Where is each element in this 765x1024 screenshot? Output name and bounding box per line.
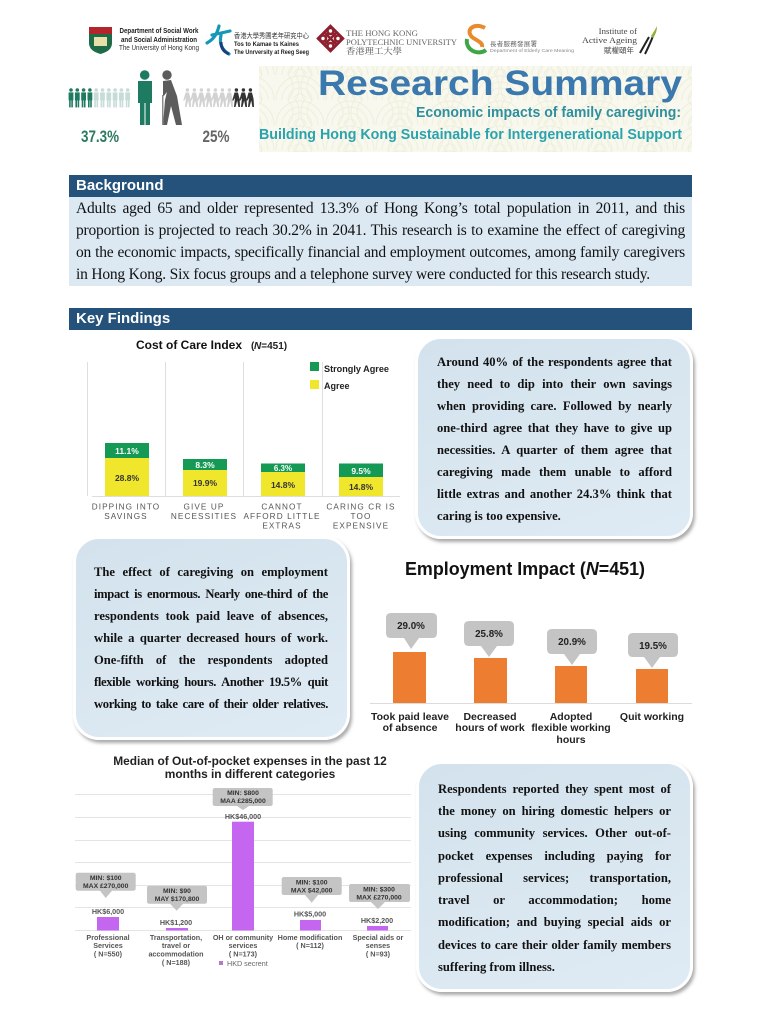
category labels: AFFORD LITTLE xyxy=(243,512,321,521)
category labels: ( N=93) xyxy=(366,950,391,958)
legend: HKD secrent xyxy=(227,959,268,968)
callout: cost of care summary: little extras and another 24.3% think that xyxy=(437,487,672,501)
bar: cannot afford little extras xyxy=(261,464,305,496)
category labels xyxy=(371,711,684,746)
logo: HKU crest and department name: The University of Hong Kong xyxy=(119,43,199,52)
heading: Key Findings xyxy=(69,308,692,330)
bar: transportation: HK$1,200 xyxy=(160,918,192,927)
statistic: 25%: 25% xyxy=(202,127,230,146)
logo: Institute of Active Ageing: Active Ageing xyxy=(582,35,638,45)
chart: Cost of Care Index stacked bars xyxy=(88,340,400,530)
logo: Hong Kong Polytechnic University: 香港理工大學 xyxy=(346,46,403,56)
callout: out-of-pocket summary: devices to care their older family members xyxy=(438,938,671,952)
subtitle line 1: Economic impacts of family caregiving: xyxy=(416,104,681,121)
callout: cost of care summary: necessities. A quarter of them agree that xyxy=(437,443,672,457)
heading: Background xyxy=(69,175,692,197)
bar: quit working xyxy=(628,633,678,703)
heading: Key Findings: Key Findings xyxy=(76,310,170,327)
bar: home modification: HK$5,000 xyxy=(294,910,326,918)
logo: Sau Po Centre style emblem and text: Tos to Kamae ts Kaines xyxy=(234,41,299,48)
bar: took paid leave xyxy=(386,613,437,703)
category labels: Quit working xyxy=(620,711,684,723)
category labels: ( N=173) xyxy=(229,950,258,958)
chart title: Cost of Care Index xyxy=(136,340,243,352)
category labels: travel or xyxy=(162,941,190,950)
bar: took paid leave: 29.0% xyxy=(397,621,425,632)
logo: HKU crest and department name xyxy=(89,26,199,54)
category labels: EXPENSIVE xyxy=(333,522,389,530)
icon: large green adult figure xyxy=(138,70,152,125)
bar: professional services xyxy=(76,873,136,930)
callout: employment summary xyxy=(73,536,350,740)
callout: cost of care summary: they need to dip into their own savings xyxy=(437,377,672,391)
category labels: hours of work xyxy=(455,722,525,734)
bar: special aids: MAX £270,000 xyxy=(356,894,402,902)
chart: median out-of-pocket expenses xyxy=(75,754,411,968)
callout: cost of care summary: one-third agree that they have to give up xyxy=(437,421,672,435)
category labels xyxy=(86,933,404,967)
bar: cannot afford little extras: 6.3% xyxy=(274,464,292,473)
callout: out-of-pocket summary: professional services; transportation, xyxy=(438,871,671,885)
bar: decreased hours: 25.8% xyxy=(475,629,503,640)
bar: flexible hours: 20.9% xyxy=(558,637,586,648)
bar: professional services: MIN: $100 xyxy=(90,875,122,882)
logo: Hong Kong Polytechnic University xyxy=(318,26,457,56)
logo: HKU crest and department name: Department of Social Work xyxy=(120,26,198,35)
logo: Hong Kong Polytechnic University: POLYTECHNIC UNIVERSITY xyxy=(346,37,457,47)
category labels: Took paid leave xyxy=(371,711,449,723)
bar: cannot afford little extras: 14.8% xyxy=(271,480,295,490)
bar: special aids: MIN: $300 xyxy=(363,886,395,894)
callout: cost of care summary: caregiving made them unable to afford xyxy=(437,465,672,479)
bar: dipping into savings xyxy=(105,443,149,496)
sample size: N=451) xyxy=(254,341,287,352)
legend: Strongly Agree xyxy=(324,364,389,374)
category labels: flexible working xyxy=(531,722,611,734)
bar: caring is too expensive: 9.5% xyxy=(351,466,371,476)
bar: caring is too expensive: 14.8% xyxy=(349,482,373,492)
bar: dipping into savings: 11.1% xyxy=(115,446,139,456)
category labels: Special aids or xyxy=(353,933,404,942)
callout: cost of care summary xyxy=(415,336,693,539)
panel: background text xyxy=(69,197,692,286)
bar: give up necessities xyxy=(183,459,227,496)
callout: cost of care summary: when providing care. Followed by nearly xyxy=(437,399,672,413)
logo: Sau Po Centre style emblem and text: The Unrversity at Reeg Seeg xyxy=(234,49,309,56)
subtitle line 2: Building Hong Kong Sustainable for Intergenerational Support xyxy=(259,126,682,143)
callout: cost of care summary: caring is too expensive. xyxy=(437,509,561,523)
category labels: NECESSITIES xyxy=(171,512,237,521)
category labels: CANNOT xyxy=(261,502,303,512)
panel: background text: in Hong Kong. Six focus groups and a telephone survey were conducted for this research study. xyxy=(76,266,650,283)
bar: OH or community services: MIN: $800 xyxy=(227,790,259,797)
callout: employment summary: respondents took paid leave of absences, xyxy=(94,609,328,623)
icon: row of small figures, 37.3% highlighted xyxy=(69,88,130,107)
bar: home modification: MAX $42,000 xyxy=(291,888,333,894)
category labels: ( N=550) xyxy=(94,950,123,958)
bar: transportation xyxy=(147,886,207,930)
bar: professional services: MAX £270,000 xyxy=(83,883,129,890)
icon: large grey older adult with cane xyxy=(162,70,182,125)
bar: give up necessities: 19.9% xyxy=(193,478,217,488)
category labels: Professional xyxy=(86,933,130,942)
callout: employment summary: The effect of caregiving on employment xyxy=(94,565,328,579)
category labels: Decreased xyxy=(463,711,517,723)
callout: employment summary: working to take care of their older relatives. xyxy=(94,697,328,711)
bar: home modification: MIN: $100 xyxy=(296,880,328,886)
heading: Background: Background xyxy=(76,177,164,194)
category labels: Transportation, xyxy=(150,933,202,942)
panel: background text: on the economic impacts, specifically financial and employment outcomes, among family caregivers xyxy=(76,244,685,261)
callout: out-of-pocket summary: using community services. Other out-of- xyxy=(438,826,671,840)
bar: quit working: 19.5% xyxy=(639,641,667,652)
legend: Agree xyxy=(324,381,350,391)
category labels: Home modification xyxy=(278,933,342,942)
logo: Institute of Active Ageing: Institute of xyxy=(599,26,637,36)
bar: decreased hours xyxy=(464,621,514,703)
category labels: hours xyxy=(556,734,586,746)
category labels: DIPPING INTO xyxy=(92,502,160,512)
category labels: accommodation xyxy=(148,950,204,958)
logo: Sau Po Centre style emblem and text xyxy=(207,26,309,56)
callout: out-of-pocket summary: the money on hiring domestic helpers or xyxy=(438,804,671,818)
callout: out-of-pocket summary: Respondents reported they spent most of xyxy=(438,782,671,796)
bar: dipping into savings: 28.8% xyxy=(115,473,139,483)
logo: Sau Po Centre style emblem and text: 香港大學秀圃老年研究中心 xyxy=(234,31,309,40)
panel: background text: Adults aged 65 and older represented 13.3% of Hong Kong’s total population in 2011, and this xyxy=(76,200,685,217)
category labels: services xyxy=(229,941,257,950)
category labels: TOO xyxy=(351,512,371,521)
bar: OH or community services: MAA £285,000 xyxy=(220,798,266,805)
bar: special aids: HK$2,200 xyxy=(361,916,393,925)
bar: OH or community services: HK$46,000 xyxy=(225,812,261,821)
callout: employment summary: One-fifth of the respondents adopted xyxy=(94,653,328,667)
sample size: ( xyxy=(251,341,255,352)
category labels: ( N=188) xyxy=(162,958,191,967)
chart: Employment Impact bars xyxy=(370,559,692,746)
logo: department of elderly care emblem: 長者服務發展署 xyxy=(490,39,538,48)
chart title: Employment Impact (N=451) xyxy=(405,559,645,579)
bar: home modification xyxy=(282,877,342,930)
category labels: senses xyxy=(366,941,390,950)
callout: out-of-pocket summary: modification; and buying special aids or xyxy=(438,915,671,929)
legend xyxy=(310,362,389,391)
title: Research Summary xyxy=(318,64,683,103)
chart title: Median of Out-of-pocket expenses in the past 12 xyxy=(113,754,387,768)
category labels: GIVE UP xyxy=(184,502,224,512)
category labels: OH or community xyxy=(213,933,273,942)
bar: give up necessities: 8.3% xyxy=(195,460,215,470)
callout: cost of care summary: Around 40% of the respondents agree that xyxy=(437,355,672,369)
callout: employment summary: impact is enormous. Nearly one-third of the xyxy=(94,587,328,601)
bar: OH or community services xyxy=(213,788,273,930)
banner: title block xyxy=(259,64,692,152)
logo: Institute of Active Ageing: 賦權頤年 xyxy=(604,45,634,55)
callout: out-of-pocket summary: pocket expenses including paying for xyxy=(438,849,671,863)
category labels: Services xyxy=(93,941,123,950)
category labels: SAVINGS xyxy=(104,512,148,521)
bar: transportation: MAY $170,800 xyxy=(155,896,200,903)
bar: special aids xyxy=(349,884,410,930)
category labels: EXTRAS xyxy=(262,522,302,530)
callout: out-of-pocket summary: travel or accommodation; home xyxy=(438,893,671,907)
callout: employment summary: while a quarter decreased hours of work. xyxy=(94,631,328,645)
bar: caring is too expensive xyxy=(339,464,383,496)
logo: department of elderly care emblem: Department of Elderly Care Meaning xyxy=(490,48,575,53)
category labels: of absence xyxy=(383,722,438,734)
bar: transportation: MIN: $90 xyxy=(163,888,191,895)
bar: flexible hours xyxy=(547,629,597,703)
category labels xyxy=(92,502,396,530)
panel: background text: proportion is projected to reach 30.2% in 2041. This research is to examine the effect of caregiving xyxy=(76,222,685,239)
logo: department of elderly care emblem xyxy=(467,26,575,53)
logo: HKU crest and department name: and Social Administration xyxy=(121,35,197,44)
logo: Institute of Active Ageing xyxy=(582,26,657,55)
category labels: CARING CR IS xyxy=(326,502,396,512)
category labels: ( N=112) xyxy=(296,941,324,950)
statistic: 37.3%: 37.3% xyxy=(81,127,119,146)
icon: row of small older figures, 25% highlighted xyxy=(183,88,254,107)
bar: professional services: HK$6,000 xyxy=(92,907,124,916)
logo: Hong Kong Polytechnic University: THE HONG KONG xyxy=(346,28,418,38)
chart title xyxy=(113,754,387,781)
category labels: Adopted xyxy=(550,711,592,723)
chart title: months in different categories xyxy=(165,767,336,781)
callout: out-of-pocket summary xyxy=(416,761,693,992)
callout: out-of-pocket summary: suffering from illness. xyxy=(438,960,555,974)
callout: employment summary: flexible working hours. Another 19.5% quit xyxy=(94,675,328,689)
